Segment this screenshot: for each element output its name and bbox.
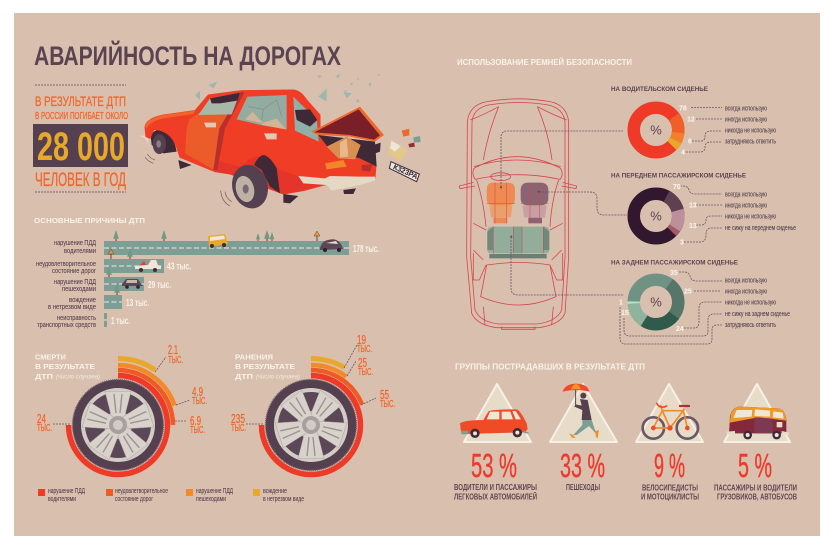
legend and values: front passenger: 3	[680, 240, 684, 246]
road bar: vehicle fault 1	[37, 313, 130, 329]
legend and values: driver: иногда использую	[725, 114, 767, 124]
value labels: injuries: ТЫС.	[231, 423, 246, 434]
group: trucks and buses: 5 %	[738, 447, 772, 484]
group: car occupants: ЛЕГКОВЫХ АВТОМОБИЛЕЙ	[454, 492, 537, 502]
group: pedestrians: ПЕШЕХОДЫ	[566, 483, 600, 492]
icon: pedestrian with umbrella	[563, 384, 599, 438]
road bar: drunk driving 13: в нетрезвом виде	[48, 304, 96, 311]
road bar: driver violations 178: нарушение ПДД	[54, 240, 96, 247]
group: cyclists: 9 %	[654, 447, 685, 484]
heading: deaths: (число случаев)	[56, 374, 100, 380]
vehicle: dark sedan	[122, 279, 143, 289]
heading: deaths: В РЕЗУЛЬТАТЕ	[35, 362, 95, 371]
donut section: driver seat: НА ВОДИТЕЛЬСКОМ СИДЕНЬЕ	[611, 86, 708, 93]
chart: injuries by cause (tyre)	[231, 332, 395, 489]
legend and values: rear passenger: не сижу на заднем сиденье	[725, 309, 790, 318]
heading: injuries: ДТП	[235, 372, 253, 381]
legend and values: rear passenger	[619, 270, 790, 344]
legend and values: rear passenger: никогда не использую	[725, 298, 776, 306]
legend: вождение	[263, 488, 287, 495]
value labels: injuries: 19	[357, 332, 366, 347]
illustration: crashed red car	[139, 73, 421, 212]
headline statistic block: 28 000	[37, 125, 125, 169]
legend: неудовлетворительное	[115, 488, 168, 495]
value labels: deaths: ТЫС.	[192, 396, 207, 407]
road bar: driver violations 178: 178 тыс.	[353, 244, 379, 255]
legend and values: driver: 12	[687, 116, 695, 124]
legend: нарушение ПДД	[48, 488, 85, 495]
legend: состояние дорог	[115, 496, 153, 503]
group: cyclists	[636, 384, 703, 502]
tyre wheel: injuries	[247, 361, 375, 489]
donut section: driver seat	[611, 86, 776, 161]
group: car occupants: 53 %	[471, 447, 517, 484]
donut section: driver seat: %	[650, 122, 662, 138]
legend and values: front passenger: не сижу на переднем сиденье	[725, 223, 796, 232]
legend and values: front passenger: всегда использую	[725, 190, 767, 198]
value labels: injuries: 235	[231, 411, 245, 426]
legend and values: driver: всегда использую	[725, 104, 767, 112]
road bar chart: causes of accidents	[36, 230, 379, 329]
group: trucks and buses	[714, 384, 797, 502]
value labels: injuries: ТЫС.	[380, 399, 395, 410]
icon: van	[727, 407, 789, 439]
road bar: pedestrian violations 29: пешеходами	[62, 286, 96, 293]
road bar: road conditions 43: 43 тыс.	[167, 262, 191, 272]
vehicle: white pickup	[135, 260, 161, 272]
heading: injuries: В РЕЗУЛЬТАТЕ	[235, 362, 295, 371]
value labels: injuries: 55	[380, 387, 389, 402]
heading: deaths: СМЕРТИ	[35, 352, 66, 362]
heading: injuries: РАНЕНИЯ	[235, 352, 273, 362]
donut section: front passenger seat: НА ПЕРЕДНЕМ ПАССАЖИРСКОМ СИДЕНЬЕ	[611, 172, 746, 180]
value labels: deaths: 4.9	[192, 384, 203, 399]
legend and values: driver: затрудняюсь ответить	[725, 136, 776, 146]
donut chart: driver	[625, 99, 687, 161]
legend: нарушение ПДД	[196, 488, 233, 495]
roadside trees and signs	[106, 230, 320, 295]
donut section: front passenger seat: %	[650, 208, 662, 224]
road bar: pedestrian violations 29: 29 тыс.	[148, 280, 171, 291]
headline statistic block	[33, 85, 128, 192]
legend and values: front passenger: 70	[673, 184, 681, 191]
donut chart: rear passenger	[625, 271, 687, 333]
legend and values: rear passenger: 25	[684, 288, 692, 296]
heading: deaths	[35, 352, 100, 381]
icon: bicycle	[643, 403, 698, 439]
heading: injuries: (число случаев)	[256, 374, 300, 380]
group: pedestrians	[550, 384, 617, 492]
donut section: rear passenger seat: НА ЗАДНЕМ ПАССАЖИРСКОМ СИДЕНЬЕ	[611, 260, 738, 266]
arcs: deaths	[68, 358, 175, 474]
legend and values: driver: 78	[679, 106, 687, 112]
group: cyclists: И МОТОЦИКЛИСТЫ	[641, 492, 699, 502]
group: trucks and buses: ГРУЗОВИКОВ, АВТОБУСОВ	[717, 492, 797, 502]
group: trucks and buses: ПАССАЖИРЫ И ВОДИТЕЛИ	[714, 484, 797, 492]
vehicle: yellow bus	[208, 234, 228, 248]
road bar: vehicle fault 1: неисправность	[57, 315, 96, 322]
donut section: rear passenger seat	[611, 260, 790, 344]
road bar: road conditions 43	[36, 259, 191, 275]
legend: в нетрезвом виде	[263, 496, 304, 503]
legend and values: rear passenger: всегда использую	[725, 276, 767, 284]
legend and values: driver: 4	[681, 150, 685, 156]
road bar: road conditions 43: неудовлетворительное	[36, 261, 96, 268]
legend and values: front passenger: 13	[689, 223, 697, 230]
legend and values: rear passenger: 15	[621, 310, 629, 317]
legend and values: front passenger: иногда использую	[725, 200, 767, 210]
road bar: drunk driving 13: 13 тыс.	[126, 298, 149, 309]
heading: seat belt use: ИСПОЛЬЗОВАНИЕ РЕМНЕЙ БЕЗОПАСНОСТИ	[457, 58, 632, 67]
chart: deaths by cause (tyre)	[35, 342, 207, 474]
legend and values: rear passenger: 24	[676, 326, 684, 333]
legend and values: rear passenger: 1	[619, 300, 623, 306]
donut section: front passenger seat	[611, 172, 796, 247]
heading: main causes: ОСНОВНЫЕ ПРИЧИНЫ ДТП	[34, 216, 145, 225]
road bar: pedestrian violations 29: нарушение ПДД	[54, 279, 96, 286]
value labels: deaths: 6.9	[190, 413, 201, 428]
road bar: driver violations 178: водителями	[64, 248, 96, 255]
seats	[487, 183, 549, 258]
value labels: injuries	[231, 332, 395, 434]
value labels: deaths: ТЫС.	[190, 425, 205, 436]
group: pedestrians: 33 %	[560, 447, 605, 484]
donut section: rear passenger seat: %	[650, 294, 662, 310]
arcs: injuries	[262, 358, 362, 474]
car top-view outline with seats	[459, 99, 577, 329]
legend and values: driver	[679, 104, 776, 156]
value labels: deaths: 24	[37, 411, 46, 426]
legend: пешеходами	[196, 496, 226, 503]
legend and values: front passenger	[673, 184, 796, 246]
illustration: crashed red car: К323РА	[392, 162, 420, 181]
legend	[38, 488, 304, 503]
value labels: deaths: 2.1	[168, 342, 178, 357]
title: АВАРИЙНОСТЬ НА ДОРОГАХ	[34, 40, 341, 71]
headline statistic block: В РОССИИ ПОГИБАЕТ ОКОЛО	[35, 111, 128, 122]
heading: injuries	[235, 352, 300, 381]
value labels: injuries: ТЫС.	[357, 344, 372, 355]
legend and values: front passenger: никогда не использую	[725, 212, 776, 220]
group: car occupants: ВОДИТЕЛИ И ПАССАЖИРЫ	[454, 483, 537, 492]
road bar: drunk driving 13: вождение	[69, 297, 96, 304]
value labels: deaths: ТЫС.	[37, 423, 52, 434]
legend: водителями	[48, 496, 76, 503]
legend and values: driver: никогда не использую	[725, 126, 776, 134]
value labels: injuries: ТЫС.	[358, 367, 373, 378]
donut chart: front passenger	[625, 185, 687, 247]
value labels: deaths	[37, 342, 207, 436]
road bar: pedestrian violations 29	[54, 277, 171, 293]
tyre wheel: deaths	[72, 380, 164, 470]
legend and values: driver: 6	[688, 138, 692, 146]
road bar: vehicle fault 1: 1 тыс.	[111, 316, 130, 327]
road bar: drunk driving 13	[48, 295, 149, 311]
group: cyclists: ВЕЛОСИПЕДИСТЫ	[642, 484, 698, 492]
icon: red car	[460, 409, 530, 438]
value labels: deaths: ТЫС.	[168, 355, 183, 366]
leader lines from seats to donuts	[501, 131, 627, 295]
vehicle: grey car	[320, 239, 343, 252]
headline statistic block: В РЕЗУЛЬТАТЕ ДТП	[35, 93, 126, 109]
road bar: vehicle fault 1: транспортных средств	[37, 322, 96, 329]
legend and values: rear passenger: затрудняюсь ответить	[725, 320, 776, 329]
road bar: road conditions 43: состояние дорог	[52, 268, 96, 275]
legend and values: rear passenger: 35	[670, 270, 678, 277]
legend and values: rear passenger: иногда использую	[725, 286, 767, 296]
value labels: injuries: 25	[358, 355, 367, 370]
heading: deaths: ДТП	[35, 372, 53, 381]
heading: victim groups: ГРУППЫ ПОСТРАДАВШИХ В РЕЗУЛЬТАТЕ ДТП	[455, 362, 645, 372]
group: car occupants	[454, 384, 537, 502]
headline statistic block: ЧЕЛОВЕК В ГОД	[35, 170, 126, 191]
road bar: driver violations 178	[54, 240, 379, 255]
legend and values: front passenger: 13	[689, 202, 697, 210]
